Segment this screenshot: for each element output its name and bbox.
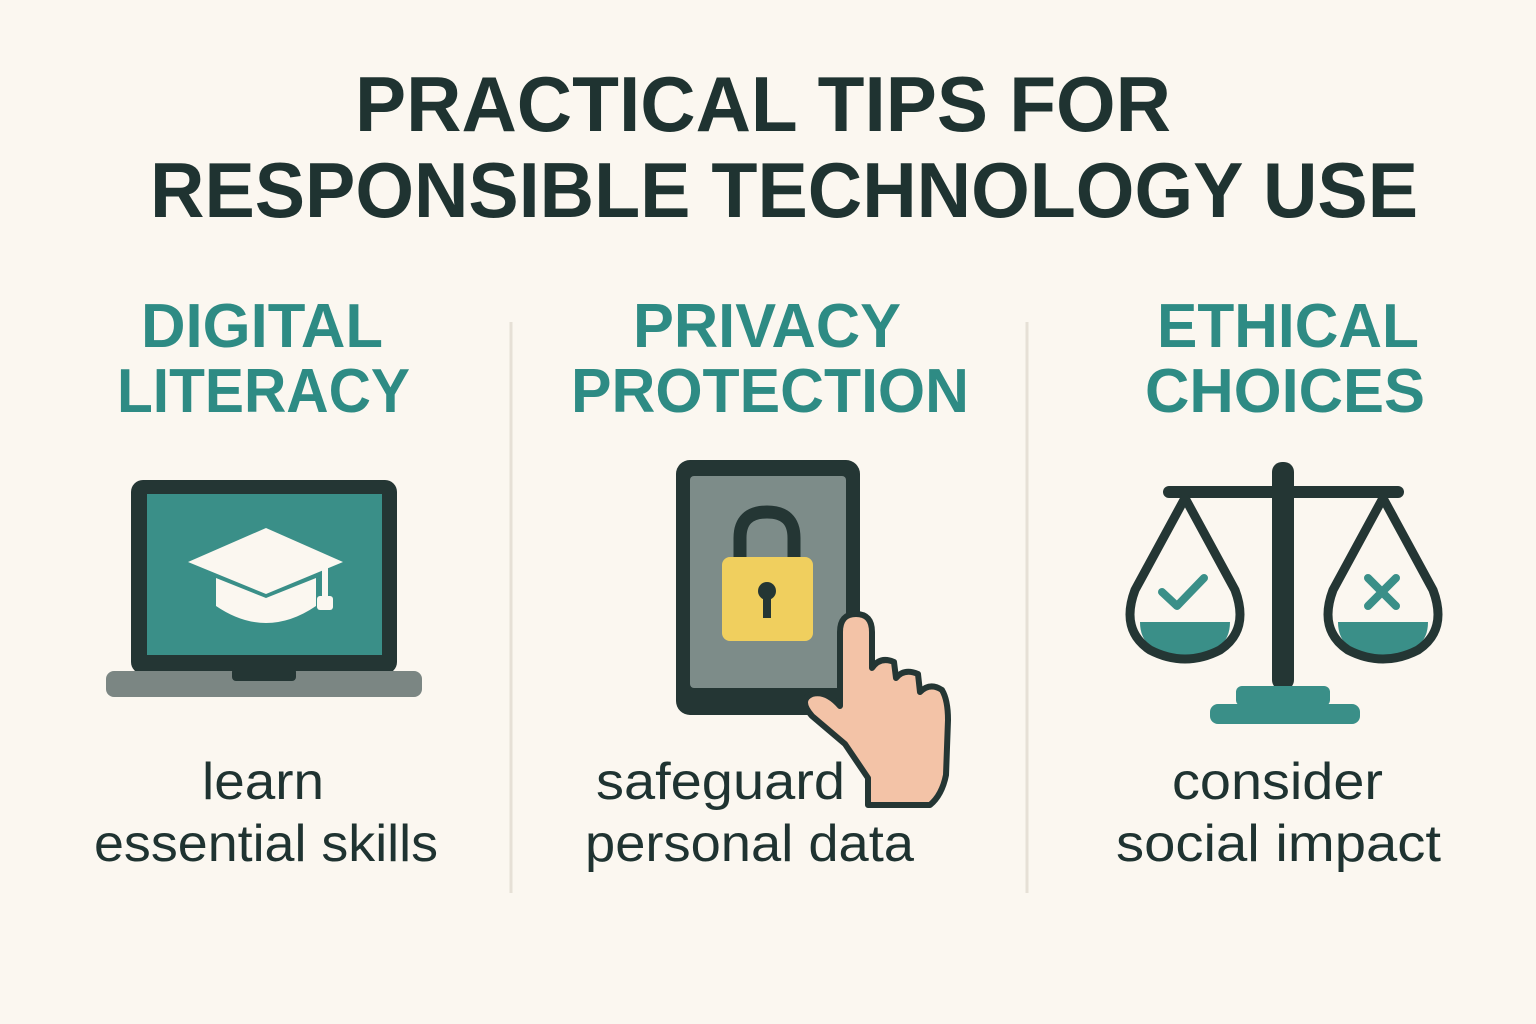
icon: scales of justice: [1130, 462, 1438, 724]
heading: ethical choices: ETHICAL: [1157, 292, 1419, 361]
heading: privacy protection: PRIVACY: [633, 292, 901, 361]
heading: privacy protection: [571, 292, 969, 426]
icon: laptop with graduation cap: [106, 480, 422, 697]
icon: tablet with lock and hand: [676, 460, 948, 805]
heading: privacy protection: PROTECTION: [571, 357, 969, 426]
text: safeguard personal data: safeguard: [596, 753, 845, 811]
title: [150, 60, 1418, 234]
heading: ethical choices: CHOICES: [1145, 357, 1425, 426]
panel: digital literacy: [94, 292, 438, 873]
title: RESPONSIBLE TECHNOLOGY USE: [150, 146, 1418, 234]
heading: digital literacy: LITERACY: [117, 357, 410, 426]
text: safeguard personal data: personal data: [585, 815, 914, 873]
heading: ethical choices: [1145, 292, 1425, 426]
text: learn essential skills: learn: [202, 753, 324, 811]
text: learn essential skills: [94, 753, 438, 873]
text: learn essential skills: essential skills: [94, 815, 438, 873]
heading: digital literacy: DIGITAL: [141, 292, 383, 361]
text: consider social impact: social impact: [1116, 815, 1442, 873]
heading: digital literacy: [117, 292, 410, 426]
title: PRACTICAL TIPS FOR: [355, 60, 1171, 148]
panel: ethical choices: [1116, 292, 1442, 873]
text: consider social impact: [1116, 753, 1442, 873]
text: consider social impact: consider: [1172, 753, 1383, 811]
panel: privacy protection: [571, 292, 969, 873]
text: safeguard personal data: [585, 753, 914, 873]
